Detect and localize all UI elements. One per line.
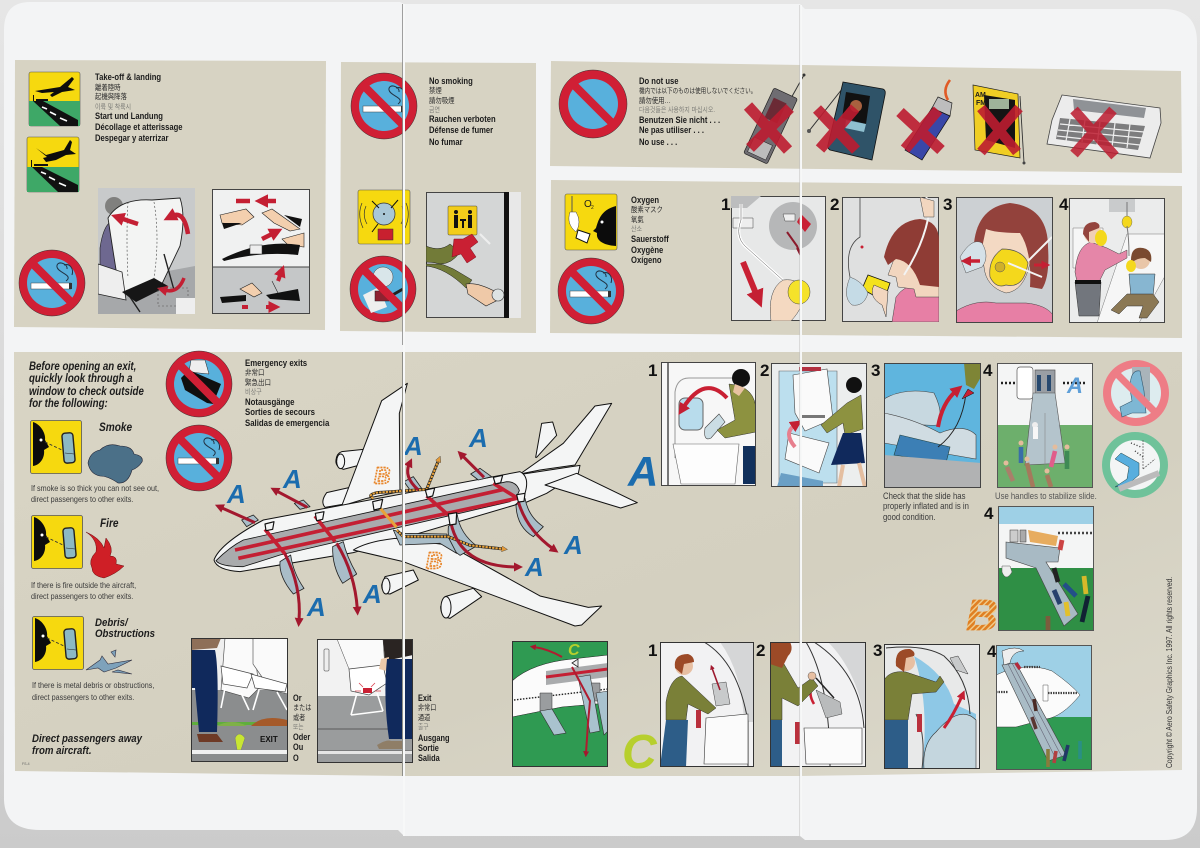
text: direct passengers away: from aircraft.: [32, 744, 92, 757]
text: emergency exits: Salidas de emergencia: [245, 417, 330, 428]
overwing route: [376, 503, 397, 527]
tail and rear fuselage: [517, 403, 637, 508]
panel: emergency exits: [14, 351, 1182, 779]
text: exit: 非常口: [418, 702, 436, 712]
aircraft diagram: [214, 383, 637, 626]
icon: look at debris: [32, 616, 84, 670]
sign: do not disable detector: [350, 256, 416, 322]
sign: no smoking: [19, 250, 85, 316]
text: no smoking: No fumar: [429, 136, 463, 147]
exit labels A: A: [226, 479, 246, 509]
text: check slide: Check that the slide has: [883, 490, 965, 501]
step number 2: 2: [830, 195, 839, 214]
text: check slide: properly inflated and is in: [883, 500, 969, 511]
text: emergency exits: Emergency exits: [245, 357, 307, 368]
text: oxygen: Oxígeno: [631, 254, 662, 265]
illustration: pull mask: [731, 196, 826, 321]
illustration: floor path lights: EXIT: [260, 735, 278, 744]
door A step 4: 4: [983, 361, 993, 380]
text: debris advice: [32, 680, 154, 702]
icon: oxygen mask: 2: [591, 205, 594, 211]
text: or: 或者: [293, 712, 305, 722]
text: oxygen: Sauerstoff: [631, 233, 669, 244]
sign: prohibited: [559, 70, 627, 138]
icon: mobile phone crossed out: [744, 74, 806, 164]
door C step 4: 4: [987, 642, 997, 661]
text: exit: Sortie: [418, 743, 439, 753]
text: oxygen: [631, 194, 669, 265]
text: smoke advice: [31, 483, 159, 504]
text: emergency exits: Notausgänge: [245, 396, 295, 407]
text: or: Oder: [293, 732, 311, 742]
text: take-off and landing: [95, 71, 183, 143]
text: emergency exits: Sorties de secours: [245, 406, 315, 417]
text: emergency exits: 비상구: [245, 387, 262, 396]
exit labels A: A: [403, 431, 423, 461]
text: take-off and landing: Despegar y aterrizar: [95, 132, 169, 143]
text: check slide: [883, 490, 969, 522]
icon: radio crossed out: [973, 85, 1026, 164]
text: no smoking: Rauchen verboten: [429, 113, 496, 124]
icon: landing: [27, 137, 79, 192]
graphic: smoke cloud: [88, 445, 142, 483]
text: do not use: Benutzen Sie nicht . . .: [639, 114, 720, 125]
escape slides: [242, 468, 543, 594]
icon: lighter crossed out: [900, 80, 952, 160]
panel: no smoking: [340, 62, 536, 333]
text: debris advice: If there is metal debris or obstructions,: [32, 680, 154, 690]
text: do not use: No use . . .: [639, 136, 677, 147]
text: no smoking: 禁煙: [429, 85, 442, 95]
text: oxygen: 酸素マスク: [631, 204, 663, 214]
heading: check outside: [29, 360, 144, 410]
label: debris or obstructions: Obstructions: [95, 627, 155, 640]
illustration: floor path lights: [191, 638, 288, 762]
door A step 4: A: [1066, 373, 1083, 398]
text: or: 또는: [293, 722, 304, 731]
door A step 2: 2: [760, 361, 769, 380]
text: oxygen: 氧氣: [631, 214, 644, 224]
illustration: adjust mask: [956, 197, 1053, 323]
door label B: B: [966, 591, 998, 640]
door C step 2: [756, 641, 866, 767]
sign: do not sit in door: [1103, 360, 1169, 426]
text: check slide: good condition.: [883, 511, 935, 522]
heading: check outside: window to check outside: [29, 385, 144, 398]
heading: check outside: quickly look through a: [29, 372, 133, 385]
door B step 4: [984, 504, 1094, 631]
text: exit: Ausgang: [418, 733, 450, 743]
step number 1: 1: [721, 195, 730, 214]
panel: oxygen: [550, 180, 1182, 338]
text: fire advice: [31, 580, 136, 601]
heading: check outside: for the following:: [29, 397, 108, 410]
sign: no luggage: [166, 351, 232, 417]
icon: oxygen mask: O: [584, 199, 592, 210]
text: take-off and landing: 離着陸時: [95, 82, 121, 92]
text: smoke advice: If smoke is so thick you can not see out,: [31, 483, 159, 493]
text: use handles: Use handles to stabilize slide.: [995, 490, 1097, 501]
illustration: door C slides overview: C: [568, 642, 580, 659]
door A step 3: [871, 361, 981, 488]
icon: portable television crossed out: [807, 82, 885, 160]
illustration: seat row light: [317, 639, 413, 763]
text: take-off and landing: Take-off & landing: [95, 71, 161, 82]
text: emergency exits: [245, 357, 330, 428]
illustration: door C slides overview: [512, 641, 608, 767]
text: oxygen: Oxygène: [631, 244, 664, 255]
heading: check outside: Before opening an exit,: [29, 360, 136, 373]
label: smoke: Smoke: [99, 421, 132, 434]
door C step 3: 3: [873, 641, 882, 660]
sign: no smoking: [166, 425, 232, 491]
text: exit: 通道: [418, 712, 430, 722]
text: exit: Salida: [418, 753, 440, 763]
cabin floor: [216, 482, 519, 567]
door C step 4: [987, 642, 1092, 770]
door label C: C: [622, 726, 658, 779]
copyright: Copyright © Aero Safety Graphics Inc. 1997. All rights reserved.: [1164, 577, 1174, 768]
door C step 1: [648, 641, 754, 767]
exit labels A: [226, 423, 658, 622]
text: take-off and landing: Start und Landung: [95, 110, 163, 121]
text: oxygen: Oxygen: [631, 194, 659, 205]
sign: jump to slide: [1102, 432, 1168, 498]
exit doors: [265, 475, 525, 531]
text: emergency exits: 非常口: [245, 368, 265, 377]
print code: FS-4: [22, 762, 30, 766]
text: no smoking: [429, 75, 496, 147]
text: or: [293, 693, 312, 763]
cross aisles: [265, 483, 519, 554]
text: exit: 출구: [418, 721, 429, 731]
text: or: O: [293, 753, 299, 763]
illustration: fasten seatbelt: [212, 189, 310, 314]
overwing exits, orange routes: [371, 460, 503, 549]
graphic: flame: [86, 532, 124, 578]
label: debris or obstructions: [95, 616, 155, 640]
text: exit: [418, 693, 450, 763]
text: no smoking: 금연: [429, 106, 440, 114]
text: do not use: 다음것들은 사용하지 마십시오.: [639, 104, 715, 114]
door C step 2: 2: [756, 641, 765, 660]
icon: look at fire: [32, 516, 82, 568]
text: take-off and landing: 起機與降落: [95, 91, 127, 101]
text: exit: Exit: [418, 693, 432, 703]
door C step 3: [873, 641, 980, 769]
text: or: Or: [293, 693, 302, 703]
exit labels A: A: [563, 530, 583, 560]
icon: electronic game keyboard crossed out: [1047, 95, 1161, 158]
illustration: assist child: [1069, 198, 1165, 323]
text: do not use: [639, 75, 756, 147]
label: debris or obstructions: Debris/: [95, 616, 129, 629]
panel: do not use devices: [550, 61, 1182, 173]
sign: no smoking: [558, 258, 624, 324]
label: fire: Fire: [100, 517, 119, 530]
upper wing and engines: [323, 383, 407, 507]
exit labels A: A: [282, 464, 302, 494]
door C step 1: 1: [648, 641, 657, 660]
text: fire advice: If there is fire outside the aircraft,: [31, 580, 136, 590]
text: fire advice: direct passengers to other exits.: [31, 591, 133, 601]
icon: oxygen mask: [565, 194, 617, 250]
text: take-off and landing: 이륙 및 착륙시: [95, 101, 131, 111]
panel: take-off and landing: [14, 60, 326, 330]
text: no smoking: 請勿吸煙: [429, 95, 455, 105]
door A step 2: [760, 361, 867, 487]
text: emergency exits: 緊急出口: [245, 378, 271, 387]
icon: smoke detector alarm: [358, 190, 410, 244]
illustration: hand and lavatory door: [426, 192, 521, 318]
text: smoke advice: direct passengers to other exits.: [31, 494, 133, 504]
text: do not use: Do not use: [639, 75, 679, 86]
icon: radio crossed out: AM: [975, 92, 986, 99]
text: no smoking: No smoking: [429, 75, 473, 86]
aisles: [235, 489, 517, 558]
lower wing exit mark: B: [426, 547, 442, 573]
text: direct passengers away: [32, 732, 143, 757]
text: do not use: 機内では以下のものは使用しないでください。: [639, 87, 756, 95]
text: debris advice: direct passengers to other exits.: [32, 692, 134, 702]
step number 3: 3: [943, 195, 952, 214]
text: do not use: Ne pas utiliser . . .: [639, 124, 704, 135]
illustration: pull mask to face: [842, 197, 939, 322]
icon: look at smoke: [30, 420, 82, 474]
wing exit marks: B: [374, 462, 390, 488]
door B step 4: 4: [984, 504, 994, 523]
fuselage: [214, 472, 527, 572]
graphic: debris: [86, 650, 132, 674]
exit labels A: A: [362, 579, 382, 609]
icon: radio crossed out: FM: [976, 100, 986, 107]
exit labels A: A: [306, 592, 326, 622]
door A step 4: [983, 361, 1093, 488]
illustration: stow bag and seat upright: [98, 188, 195, 314]
text: or: または: [293, 703, 312, 712]
icon: take-off: [29, 72, 80, 126]
lower wing and engines: [353, 538, 602, 626]
text: direct passengers away: Direct passengers away: [32, 732, 143, 745]
door A step 3: 3: [871, 361, 880, 380]
text: do not use: 請勿使用…: [639, 95, 671, 105]
exit labels A: A: [627, 448, 658, 495]
text: no smoking: Défense de fumer: [429, 124, 494, 135]
text: or: Ou: [293, 742, 303, 752]
sign: no smoking: [351, 73, 417, 139]
text: oxygen: 산소: [631, 223, 642, 233]
exit labels A: A: [524, 552, 544, 582]
step number 4: 4: [1059, 195, 1069, 214]
text: take-off and landing: Décollage et atterissage: [95, 121, 183, 132]
exit route arrows: [221, 455, 553, 621]
exit labels A: A: [468, 423, 488, 453]
door A step 1: 1: [648, 361, 657, 380]
door A step 1: [648, 361, 756, 486]
